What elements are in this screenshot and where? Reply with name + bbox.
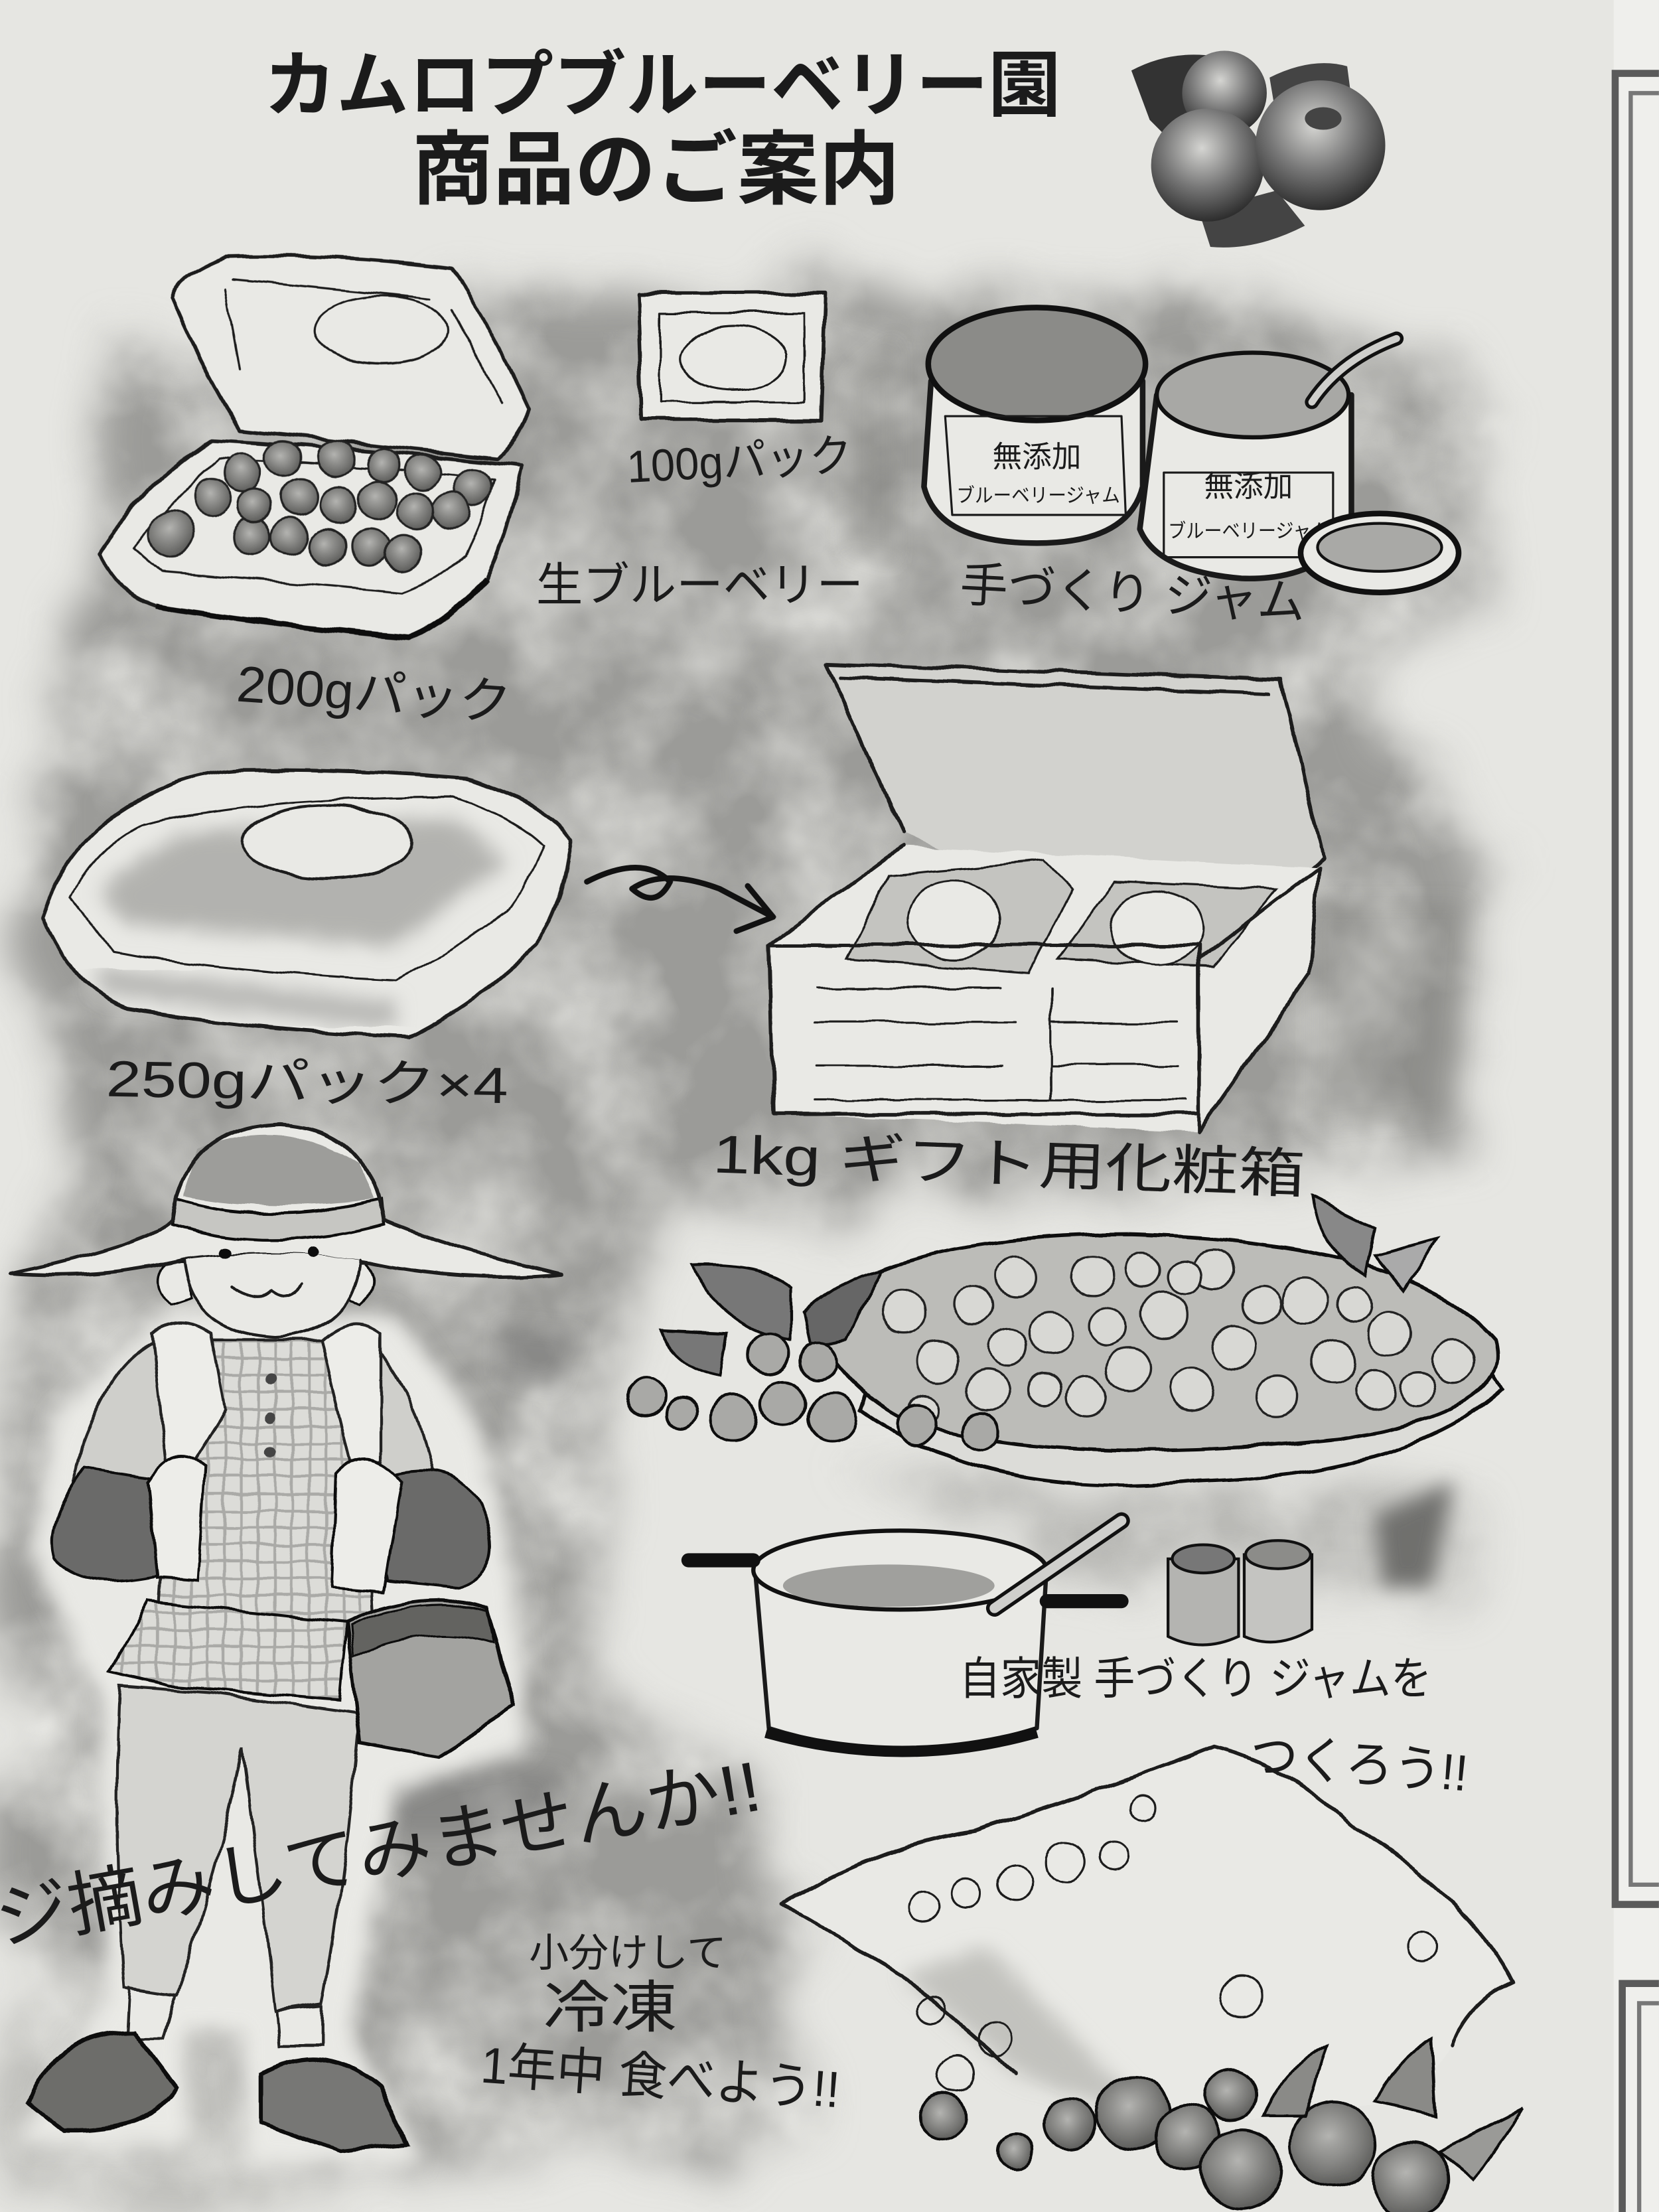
character: farmer child: [11, 1124, 561, 2166]
hat: [11, 1124, 561, 1277]
small jam jars: [1168, 1540, 1312, 1645]
arrow: [587, 867, 773, 931]
hands and towel ends: [148, 1456, 204, 1580]
spoon: [1312, 338, 1397, 402]
freezing tip: 1年中 食べよう!!: [479, 2037, 841, 2118]
open lid: [172, 256, 529, 459]
gift box: [769, 663, 1323, 1132]
fresh blueberries 200g pack: [99, 256, 529, 638]
fresh blueberries label: 生ブルーベリー: [536, 559, 863, 611]
white halo: [14, 1312, 529, 2166]
100g pack label: 100gパック: [626, 430, 853, 492]
leaves: [691, 1265, 790, 1340]
right jar: [1140, 395, 1351, 579]
freezing tip: 冷凍: [543, 1977, 677, 2040]
fresh blueberries 100g pack: [638, 293, 826, 420]
title: 商品のご案内: [412, 125, 900, 215]
jam pot: [688, 1520, 1121, 1751]
icon: blueberries: [1131, 51, 1386, 248]
jar lid: [1301, 514, 1459, 593]
left jar: [924, 381, 1143, 543]
puffed cuffs: [51, 1467, 177, 1581]
dark wash accents: [381, 338, 1467, 1834]
berries at bag base: [920, 2069, 1449, 2212]
boots: [29, 2031, 177, 2130]
towel: [153, 1323, 226, 1467]
berry picking slogan: ジ摘みしてみませんか!!: [0, 1747, 766, 1959]
apron skirt: [110, 1601, 346, 1700]
pouch: [346, 1600, 515, 1756]
upper sleeves: [74, 1340, 177, 1495]
berry cluster: [628, 1335, 999, 1450]
make jam label: 自家製 手づくり ジャムを: [960, 1654, 1432, 1704]
200g pack label: 200gパック: [235, 656, 513, 731]
jam jars: 無添加: [993, 441, 1081, 474]
jam jars: 無添加: [1204, 471, 1293, 503]
tray: [99, 440, 522, 638]
face: [183, 1254, 360, 1337]
ears: [158, 1262, 190, 1305]
gray watercolor wash: [0, 268, 1495, 2212]
jam jars: ブルーベリージャム: [1168, 520, 1329, 542]
250g pack: [42, 770, 571, 1037]
shirt: [158, 1340, 374, 1622]
berries in tray: [149, 440, 491, 571]
trousers: [117, 1686, 360, 2010]
freezing tip: [479, 1931, 841, 2118]
bowl of blueberries: [628, 1197, 1502, 1485]
title: [264, 45, 1061, 215]
jam jars: ブルーベリージャム: [956, 485, 1120, 507]
freezing tip: 小分けして: [529, 1931, 727, 1975]
ear right: [346, 1262, 373, 1305]
gift box label: 1kg ギフト用化粧箱: [712, 1124, 1306, 1205]
handmade jam label: 手づくり ジャム: [959, 559, 1307, 630]
make jam label: つくろう!!: [1248, 1727, 1470, 1802]
title: カムロプブルーベリー園: [264, 45, 1061, 125]
right edge column frame: [1614, 0, 1659, 2212]
make jam label: [960, 1654, 1470, 1802]
jam jars: [924, 307, 1459, 593]
bag of frozen blueberries: [783, 1747, 1524, 2212]
250g pack label: 250gパック×4: [106, 1051, 508, 1114]
